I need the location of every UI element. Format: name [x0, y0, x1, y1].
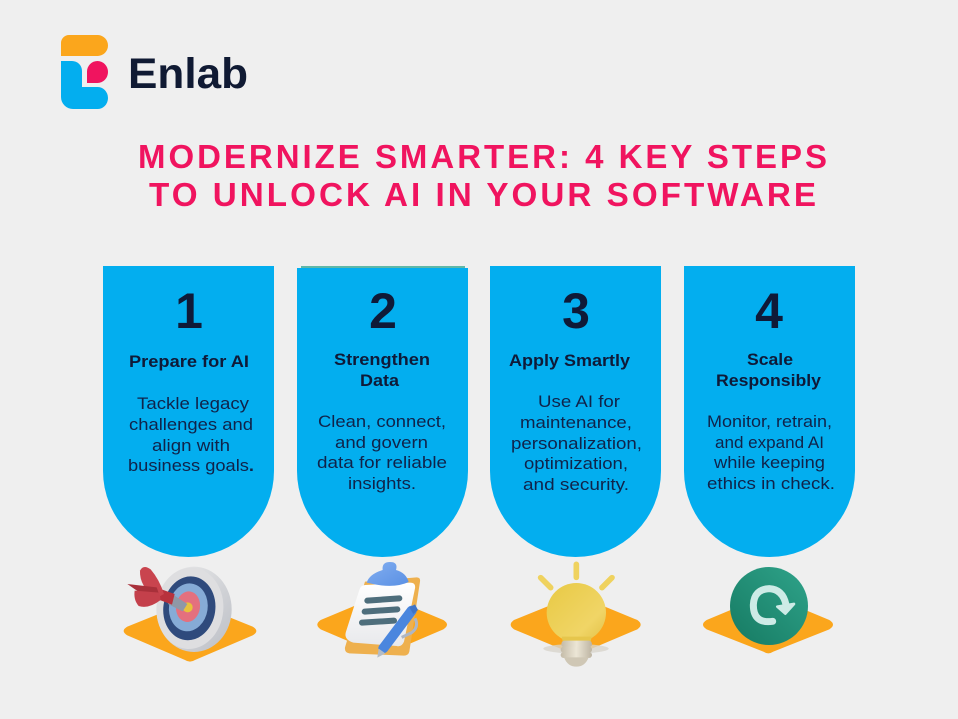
step description: and security. — [523, 475, 629, 494]
card shape — [490, 266, 661, 557]
green circle — [730, 567, 808, 645]
step description: while keeping — [713, 453, 825, 472]
orange base — [317, 596, 447, 654]
step description: Clean, connect, — [318, 412, 446, 431]
step heading — [716, 350, 822, 390]
bulb base — [561, 641, 592, 667]
clip — [367, 562, 409, 586]
step heading: Strengthen — [334, 350, 430, 369]
icon: target with dart — [124, 565, 256, 662]
step description — [128, 394, 254, 475]
dart — [168, 594, 187, 611]
step description: Tackle legacy — [137, 394, 250, 413]
orange base — [124, 602, 256, 662]
icon: light bulb — [511, 564, 641, 667]
step heading: Responsibly — [716, 371, 822, 390]
refresh arrow — [753, 589, 786, 622]
bulb glass — [547, 583, 606, 642]
step heading: Data — [360, 371, 400, 390]
card shape — [684, 266, 855, 557]
card top edge — [301, 266, 465, 269]
step description: optimization, — [524, 454, 628, 473]
step description: Monitor, retrain, — [707, 412, 832, 431]
step description — [511, 392, 642, 494]
step heading — [334, 350, 430, 390]
pen — [402, 618, 417, 637]
step number: 1 — [175, 283, 203, 339]
title: MODERNIZE SMARTER: 4 KEY STEPS — [138, 138, 830, 175]
step description: insights. — [348, 474, 416, 493]
paper — [345, 583, 415, 646]
step number: 2 — [369, 283, 397, 339]
target disc — [156, 567, 232, 652]
step description: business goals . — [128, 456, 254, 475]
orange base — [511, 596, 641, 654]
title: TO UNLOCK AI IN YOUR SOFTWARE — [149, 176, 819, 213]
logo: Enlab — [61, 35, 248, 109]
step description: challenges and — [129, 415, 253, 434]
card shape — [297, 268, 468, 557]
icon: clipboard and pen — [317, 562, 447, 658]
step description: and govern — [335, 433, 428, 452]
step heading: Scale — [747, 350, 793, 369]
bulb shadow — [543, 644, 609, 653]
step description: ethics in check. — [707, 474, 835, 493]
step description: personalization, — [511, 434, 642, 453]
step heading: Prepare for AI — [129, 352, 249, 371]
step description: maintenance, — [520, 413, 632, 432]
paper lines — [362, 598, 399, 623]
panel: step 2 — [297, 266, 468, 557]
step description — [707, 412, 835, 493]
step description: Use AI for — [538, 392, 620, 411]
panel: step 1 — [103, 266, 274, 557]
title — [138, 138, 830, 213]
logo mark — [61, 35, 108, 109]
step heading: Apply Smartly — [509, 351, 631, 370]
step description: align with — [152, 436, 230, 455]
icon: refresh button — [703, 567, 833, 653]
step number: 4 — [755, 283, 783, 339]
rays — [541, 564, 612, 588]
orange base — [703, 596, 833, 653]
step description: data for reliable — [317, 453, 447, 472]
panel: step 4 — [684, 266, 855, 557]
card shape — [103, 266, 274, 557]
step number: 3 — [562, 283, 590, 339]
panel: step 3 — [490, 266, 661, 557]
step description — [317, 412, 447, 493]
step description: and expand AI — [715, 433, 824, 452]
board — [345, 577, 420, 656]
logo wordmark: Enlab — [128, 50, 248, 98]
